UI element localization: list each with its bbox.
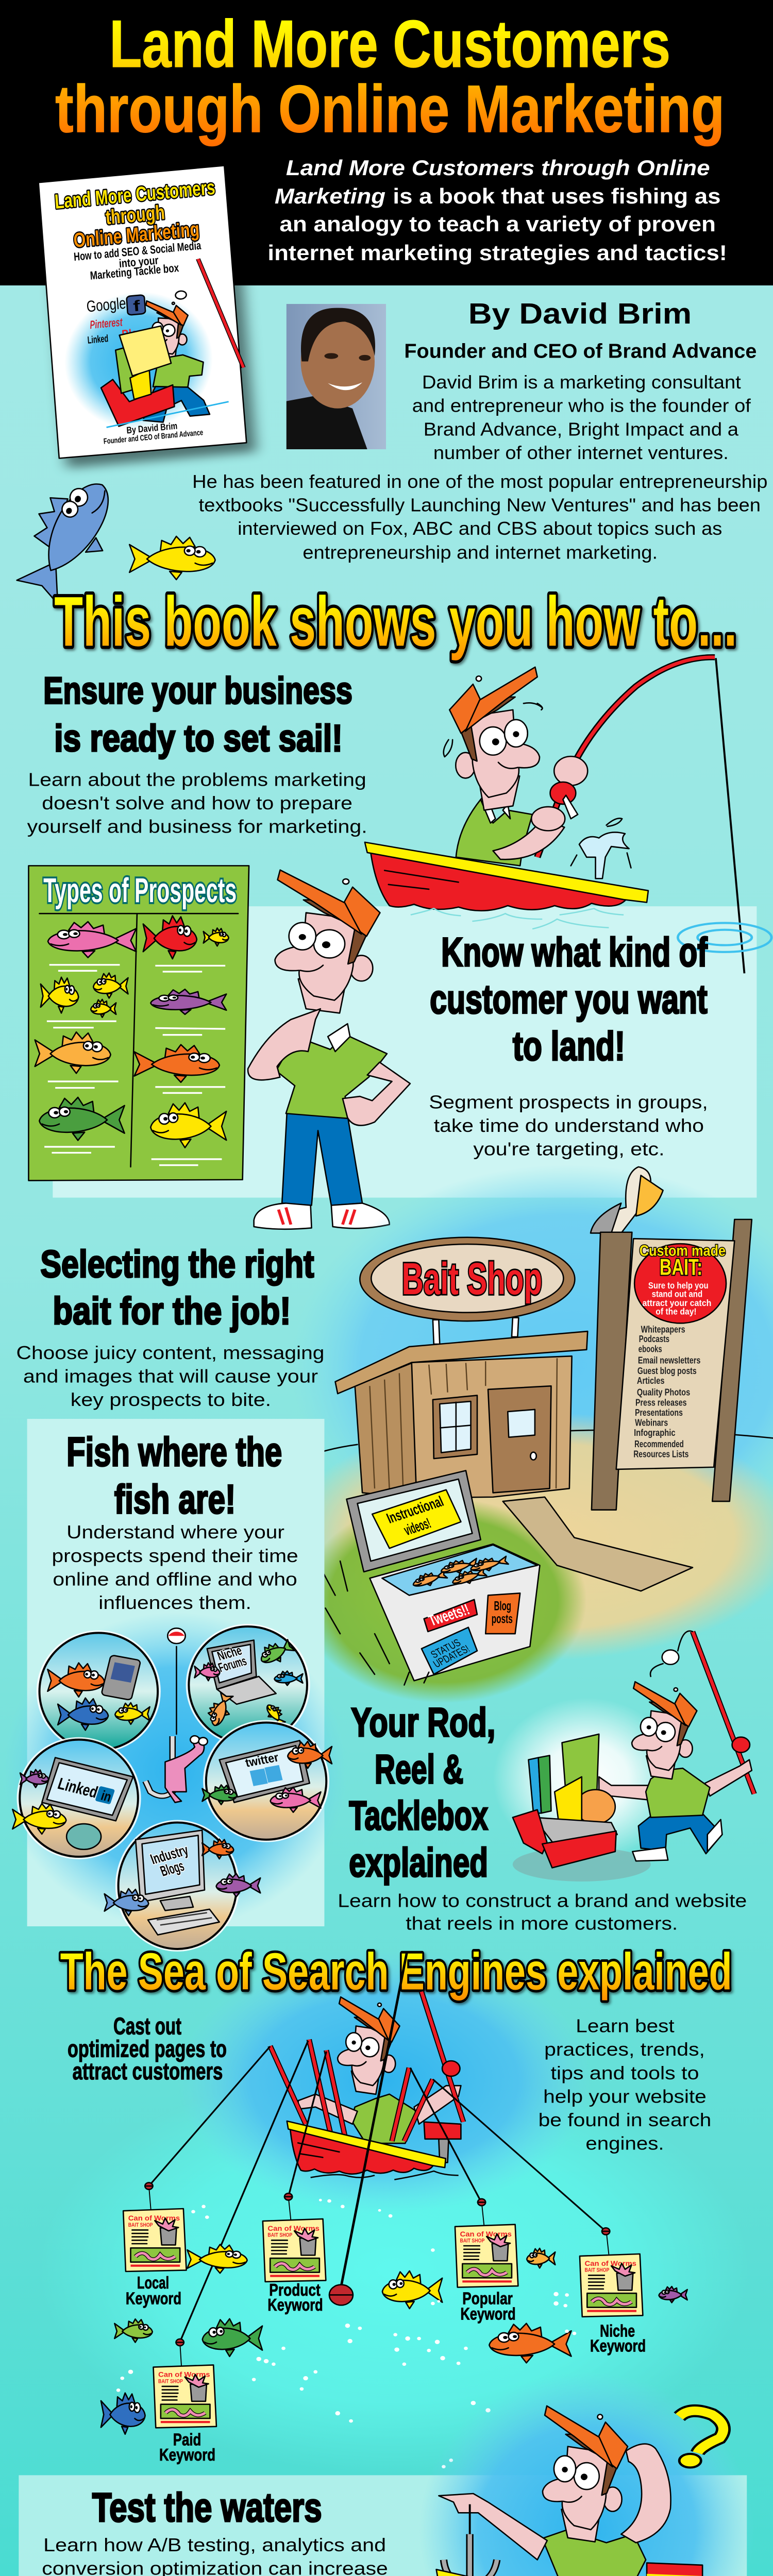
author bio [192,372,767,563]
text: selecting bait [16,1343,324,1410]
text: fish where [52,1522,298,1613]
text: learn best practices: help your website [543,2086,707,2107]
text: know what kind [429,1092,708,1160]
author bio: entrepreneurship and internet marketing. [303,543,658,563]
text: learn best practices [539,2015,711,2154]
text: fish where: Understand where your [66,1522,284,1543]
island ground [286,1413,773,1703]
text: test the waters [42,2535,388,2576]
sign board with bait list: Recommended [634,1439,684,1449]
sea fishes [101,2244,687,2434]
sign board with bait list: ebooks [638,1344,662,1354]
text: cast out: optimized pages to [68,2036,227,2062]
illustration: man with many rods [270,1992,463,2162]
illustration: bait shop [335,1238,693,1591]
circle: industry blogs: Industry [148,1842,191,1868]
bait shop sign text: Bait Shop [402,1253,542,1303]
channel circles [12,1624,332,1952]
text: test the waters: Learn how A/B testing, analytics and [43,2535,386,2555]
bubbles [116,2199,576,2468]
icon: blue fish [5,465,131,610]
heading: test the waters: Test the waters [92,2485,322,2531]
keyword page: niche [580,2254,646,2355]
text: ensure your business: doesn't solve and how to prepare [42,793,352,814]
water waves [411,908,624,929]
circle: linkedin [12,1737,141,1859]
text: cast out: Cast out [113,2013,181,2040]
path [503,1497,693,1591]
sky glow behind bait shop [291,1165,773,1566]
illustration: bait cooler: Tweets!! [426,1601,472,1629]
text: cast out [68,2013,227,2084]
book cover: Marketing Tackle box [90,261,179,282]
sign board with bait list: Webinars [635,1418,668,1428]
sign board with bait list: Sure to help you [648,1280,709,1291]
glow: test man [419,2372,754,2576]
author name: By David Brim [468,298,692,330]
illustration: questioning man [439,2406,724,2576]
icon: boat [365,842,648,911]
boat glow [177,1949,592,2214]
circle: twitter [202,1720,332,1842]
text: reels in: that reels in more customers. [406,1913,678,1934]
book cover: Google [86,294,127,315]
section: sea of search engines [19,1913,754,2576]
sign board with bait list: Presentations [635,1408,683,1418]
icon: pelican [591,1167,663,1233]
keyword page: popular [455,2225,518,2324]
book cover: By David Brim [126,420,178,436]
icon: question mark [679,2411,724,2453]
book cover: into your [119,253,159,270]
book cover: Land More Customers [54,176,216,213]
text: fish where: influences them. [98,1592,251,1613]
hook and worm [145,1628,208,1803]
panel: test the waters [19,2475,747,2576]
text: selecting bait: and images that will cause your [23,1366,318,1387]
sign board with bait list: Email newsletters [638,1355,700,1366]
section: partner and final [0,2563,773,2576]
sign board with bait list [592,1219,752,1510]
circle: industry blogs [105,1820,260,1952]
heading: fish where [66,1430,282,1522]
sign board with bait list: Press releases [635,1398,687,1408]
book cover [39,165,256,468]
circle: linkedin: Linked [56,1774,100,1802]
illustration: fisherman in boat [444,657,744,973]
book cover: Founder and CEO of Brand Advance [103,428,204,446]
circle: facebook [37,1630,161,1753]
sign board with bait list: BAIT: [660,1255,702,1280]
text: fish where: online and offline and who [53,1569,297,1590]
icon: water ripples [678,923,771,952]
illustration: boat under test man [436,2563,702,2576]
book cover: Online Marketing [73,217,200,251]
heading: know what kind: to land! [513,1024,625,1069]
illustration: bait cooler: Blog [494,1599,511,1613]
icon: yellow fish [129,536,215,580]
water glow [40,2064,749,2475]
poster title: Types of Prospects [43,872,237,910]
section: this book shows you how [27,582,773,1703]
book cover: f [132,297,141,315]
title [55,7,725,146]
heading: your rod, reel: Your Rod, [351,1700,495,1745]
prospect types poster [28,866,249,1180]
sign board with bait list: Infographic [634,1428,676,1438]
heading: fish where: fish are! [114,1477,236,1522]
illustration: bait cooler [308,1470,540,1685]
illustration: bait cooler: videos! [401,1515,433,1538]
heading: selecting the right bait: bait for the job! [53,1290,291,1333]
book cover: FORUMS [148,384,174,399]
sign board with bait list: Guest blog posts [637,1366,697,1377]
illustration: thinking man [248,870,410,1229]
book cover: Pinterest [89,315,123,331]
glow: channels [3,1613,347,1928]
bobbers [145,2182,610,2346]
text: learn best practices: be found in search [539,2110,711,2130]
book cover: Linked [87,333,109,346]
keyword page: popular: Keyword [460,2304,516,2324]
text: fish where: prospects spend their time [52,1545,298,1566]
sign board with bait list: attract your catch [642,1298,711,1308]
heading: fish where: Fish where the [66,1430,282,1475]
text: selecting bait: key prospects to bite. [71,1389,271,1410]
fishing lines [149,1953,609,2366]
sign board with bait list: Articles [637,1376,665,1386]
keyword page: product: Product [269,2280,321,2300]
keyword page: niche: Niche [600,2321,635,2341]
panel: know what kind [53,906,757,1198]
keyword page: paid: Keyword [159,2446,215,2465]
intro paragraph [267,156,727,265]
sign board with bait list: Custom made [640,1242,726,1259]
keyword page: product [263,2219,326,2315]
illustration: bait cooler: Instructional [384,1493,446,1527]
intro paragraph: Marketing [275,183,385,208]
text: your rod, reel: Learn how to construct a brand and website [338,1890,747,1911]
keyword page: local [123,2209,187,2308]
header black band [0,0,773,285]
illustration: man with tackle box [493,1631,754,1882]
section: bait, channels, tackle [3,1238,754,1952]
panel: fish where the fish are [27,1419,324,1926]
keyword page: product: Keyword [267,2296,323,2315]
circle: linkedin: in [99,1788,113,1805]
cooler labels [424,1600,477,1632]
icon: boat [287,2121,446,2174]
heading: your rod, reel: explained [349,1840,488,1886]
book cover: Blogs [121,326,149,342]
sign board with bait list: Whitepapers [641,1325,685,1335]
heading: know what kind [430,930,708,1069]
book cover: How to add SEO & Social Media [73,239,202,263]
text: learn best practices: practices, trends, [544,2039,705,2060]
heading: your rod, reel: Reel & [375,1747,463,1792]
circle: niche forums: Niche [215,1643,244,1664]
circle: niche forums: Forums [216,1654,248,1675]
text: cast out: attract customers [73,2058,223,2084]
circle: industry blogs: Blogs [158,1858,187,1879]
text: learn best practices: tips and tools to [551,2062,699,2083]
text: know what kind: you're targeting, etc. [473,1139,664,1160]
heading: selecting the right bait [40,1243,314,1333]
text: selecting bait: Choose juicy content, messaging [16,1343,324,1363]
heading: ensure your business [43,670,352,759]
circle: twitter: twitter [244,1751,280,1770]
text: learn best practices: Learn best [576,2015,675,2037]
keyword page: paid: Paid [173,2430,201,2449]
keyword page: paid [154,2365,216,2465]
keyword page: local: Local [137,2273,169,2292]
sign board with bait list: Podcasts [639,1334,669,1344]
illustration: bait cooler: STATUS [429,1637,463,1660]
heading: ensure your business: is ready to set sail! [54,717,343,759]
sign board with bait list: Resources Lists [633,1449,688,1460]
keyword page: niche: Keyword [590,2336,646,2355]
illustration: bait cooler: UPDATES! [431,1643,472,1670]
sign board with bait list: stand out and [652,1289,702,1299]
keyword page: popular: Popular [462,2289,513,2308]
section: header and author [39,7,767,563]
author photo [287,304,386,449]
heading: selecting the right bait: Selecting the right [40,1243,314,1285]
illustration: bait cooler: posts [492,1612,513,1626]
heading: your rod, reel: Tacklebox [349,1793,488,1838]
heading: ensure your business: Ensure your business [43,670,352,711]
text: know what kind: Segment prospects in groups, [429,1092,708,1113]
text: ensure your business: yourself and business for marketing. [27,816,367,837]
heading: your rod, reel [349,1700,495,1886]
text: learn best practices: engines. [585,2133,664,2154]
text: know what kind: take time do understand who [434,1115,704,1136]
book cover: through [105,200,165,229]
sign board with bait list: Quality Photos [637,1387,690,1398]
text: ensure your business: Learn about the problems marketing [28,769,366,790]
keyword page: local: Keyword [126,2289,181,2308]
text: ensure your business [27,769,367,837]
sign board with bait list: of the day! [656,1307,697,1316]
circle: niche forums [186,1624,310,1746]
